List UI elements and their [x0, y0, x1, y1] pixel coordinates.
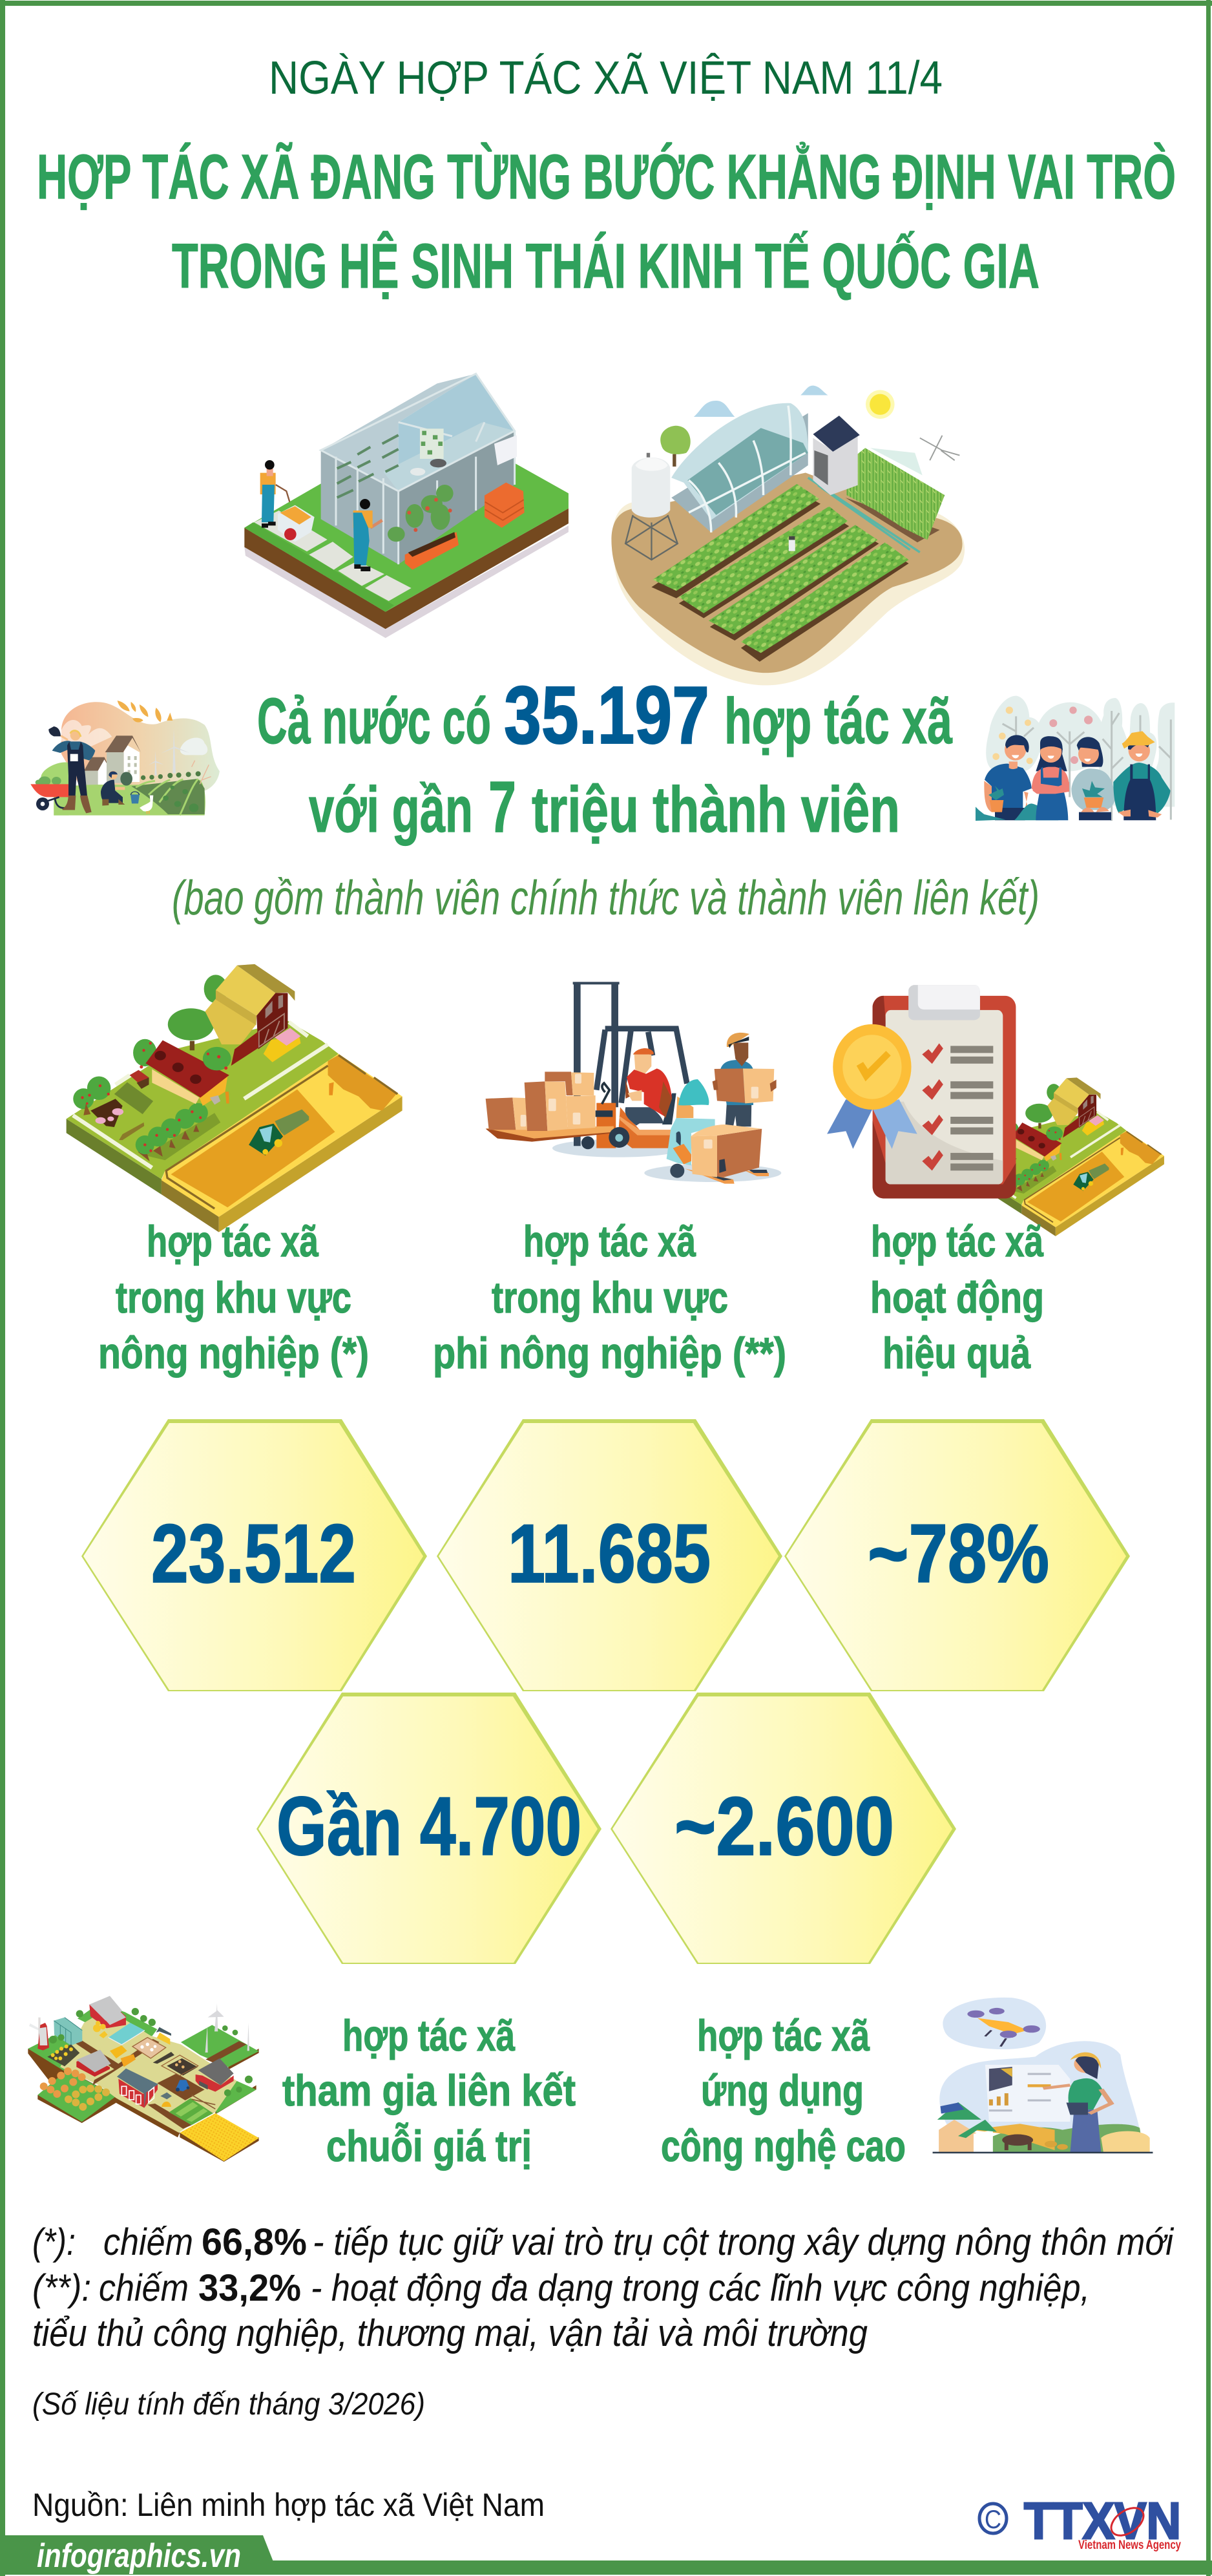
- label: effective: [870, 1217, 1044, 1378]
- label: high tech: công nghệ cao: [661, 2122, 906, 2171]
- hexagon: ~2.600: ~2.600: [674, 1780, 894, 1873]
- label: non-agricultural: [433, 1217, 786, 1378]
- footnote: non-agricultural share: chiếm: [99, 2267, 189, 2309]
- footnote: non-agricultural share: 33,2%: [198, 2267, 301, 2309]
- title: main heading: [37, 142, 1176, 301]
- title: date line: NGÀY HỢP TÁC XÃ VIỆT NAM 11/4: [269, 52, 943, 104]
- label: agricultural: trong khu vực: [116, 1273, 351, 1322]
- lower labels: [282, 2011, 906, 2171]
- illustration: high tech farming: [933, 1998, 1153, 2153]
- illustration: value chain farm: [28, 1996, 259, 2162]
- footnotes: [32, 2221, 1175, 2354]
- worker at the door: [353, 499, 382, 571]
- label: non-agricultural: phi nông nghiệp (**): [433, 1329, 786, 1378]
- person 4: [1113, 731, 1171, 820]
- hexagon: ~78%: [784, 1419, 1130, 1691]
- hexagon: 11.685: 11.685: [508, 1508, 711, 1600]
- logo: TTXVN: TTXVN: [1024, 2492, 1181, 2550]
- footer tab: infographics.vn: infographics.vn: [37, 2537, 241, 2575]
- hexagon: 11.685: [437, 1419, 782, 1691]
- statement: number of cooperatives: triệu thành viên: [532, 774, 900, 846]
- illustration: agricultural cooperatives farm: [67, 964, 402, 1232]
- statement: number of cooperatives: hợp tác xã: [724, 685, 952, 757]
- hexagon: Gần 4.700: [256, 1693, 601, 1964]
- label: effective: hoạt động: [870, 1273, 1044, 1322]
- label: value chain: tham gia liên kết: [282, 2066, 576, 2115]
- statement: number of cooperatives: 35.197: [504, 670, 709, 761]
- icon: cooperative members: [976, 696, 1175, 821]
- person 2: [1032, 736, 1069, 820]
- person 3: [1071, 737, 1116, 820]
- label: non-agricultural: trong khu vực: [492, 1273, 728, 1322]
- label: high tech: ứng dụng: [701, 2066, 864, 2115]
- worker with wheelbarrow: [260, 460, 315, 542]
- illustration: forklift and workers: [486, 982, 781, 1184]
- footnote: agricultural share: 66,8%: [202, 2221, 307, 2263]
- pallet jack: [667, 1079, 769, 1184]
- illustration: glass greenhouse: [244, 374, 569, 638]
- footnote: non-agricultural share: - hoạt động đa dạng trong các lĩnh vực công nghiệp,: [311, 2267, 1090, 2309]
- logo: TTXVN: Vietnam News Agency: [1078, 2539, 1181, 2552]
- label: agricultural: nông nghiệp (*): [98, 1329, 369, 1378]
- label: agricultural: hợp tác xã: [147, 1217, 319, 1266]
- illustration: smart farm field: [611, 386, 965, 685]
- footnote: agricultural share: chiếm: [103, 2221, 193, 2263]
- statement: number of cooperatives: với gần: [309, 774, 473, 846]
- column labels: [98, 1217, 1044, 1378]
- label: value chain: chuỗi giá trị: [326, 2122, 532, 2171]
- label: effective: hiệu quả: [883, 1329, 1031, 1378]
- logo: TTXVN: C: [985, 2506, 1001, 2534]
- footnote: agricultural share: (*):: [32, 2221, 76, 2263]
- hexagon: Gần 4.700: Gần 4.700: [277, 1780, 581, 1873]
- label: value chain: hợp tác xã: [342, 2011, 515, 2060]
- statement: number of cooperatives: Cả nước có: [257, 685, 491, 757]
- worker with box: [713, 1033, 777, 1126]
- footnote: non-agricultural share: (**):: [32, 2267, 91, 2309]
- illustration: effective cooperatives checklist: [827, 985, 1164, 1236]
- footnote: non-agricultural share: tiểu thủ công nghiệp, thương mại, vận tải và môi trường: [32, 2312, 868, 2354]
- data date note: (Số liệu tính đến tháng 3/2026): [32, 2387, 425, 2422]
- label: value chain: [282, 2011, 576, 2171]
- statement: number of cooperatives: 7: [488, 766, 516, 847]
- hexagon: ~2.600: [611, 1693, 956, 1964]
- hexagon: ~78%: ~78%: [868, 1508, 1049, 1600]
- hexagon: 23.512: [81, 1419, 427, 1691]
- footnote: non-agricultural share: [32, 2267, 1090, 2354]
- hexagon: 23.512: 23.512: [151, 1508, 356, 1600]
- label: non-agricultural: hợp tác xã: [523, 1217, 696, 1266]
- label: high tech: [661, 2011, 906, 2171]
- person 1: [984, 735, 1032, 820]
- statement: number of cooperatives: [257, 670, 952, 847]
- source: Nguồn: Liên minh hợp tác xã Việt Nam: [32, 2487, 545, 2523]
- label: effective: hợp tác xã: [871, 1217, 1043, 1266]
- label: high tech: hợp tác xã: [697, 2011, 870, 2060]
- label: agricultural: [98, 1217, 369, 1378]
- icon: farmer scene: [30, 701, 220, 816]
